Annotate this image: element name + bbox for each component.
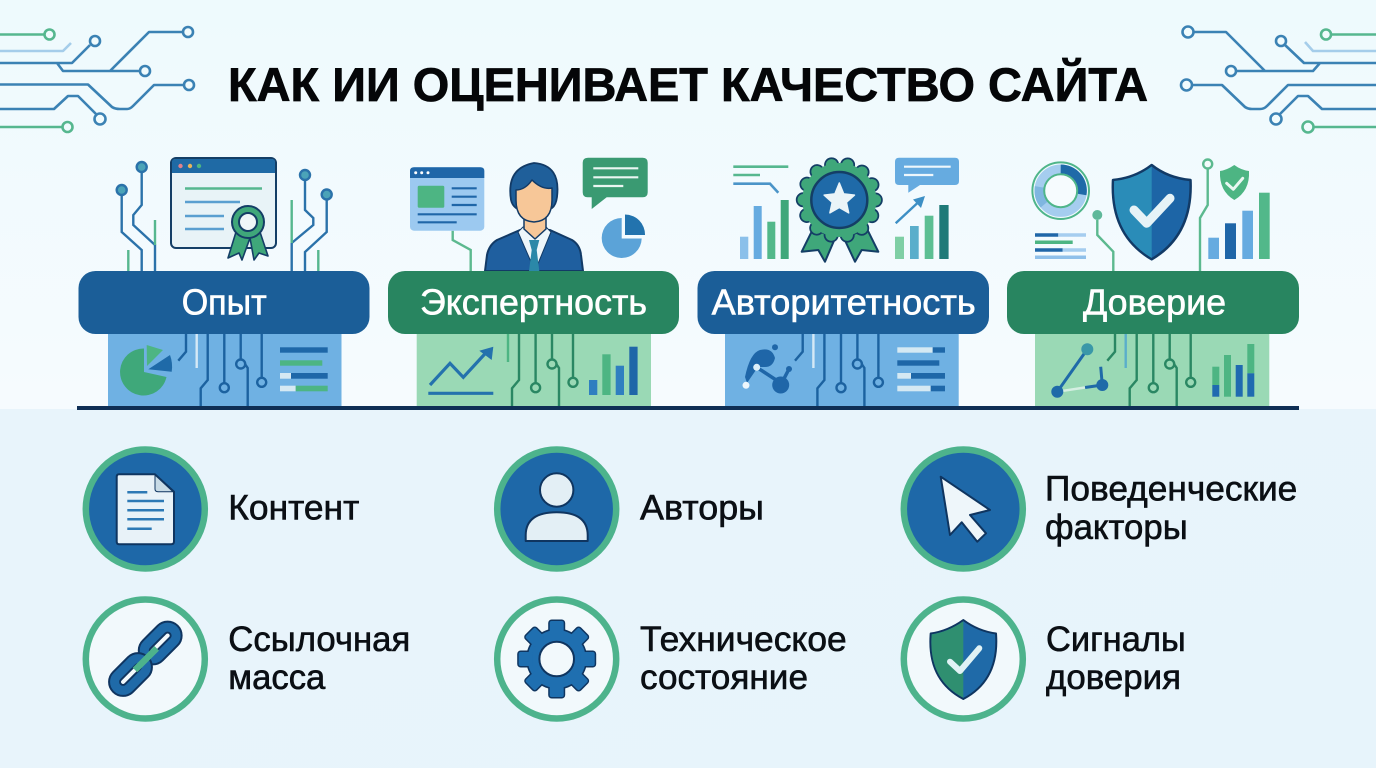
panel: Экспертность	[388, 158, 679, 406]
icon: browser window with certificate	[171, 158, 276, 260]
chart: bars	[589, 347, 638, 395]
icon: browser card	[410, 167, 484, 231]
chart: right bars	[895, 205, 949, 259]
label: Поведенческие	[1045, 470, 1297, 509]
item: Ссылочная масса	[86, 600, 410, 718]
pill: Опыт: Опыт	[182, 282, 267, 322]
base line	[77, 406, 1299, 410]
label	[640, 620, 847, 697]
pill: Авторитетность	[698, 271, 989, 334]
connector	[453, 231, 471, 271]
label: Контент	[228, 488, 359, 527]
lower block: Экспертность	[417, 334, 651, 406]
arrow: growth	[896, 196, 925, 223]
item: Контент	[86, 450, 359, 568]
icon: chain link	[86, 600, 205, 718]
text lines icon	[733, 167, 788, 193]
item: Поведенческие факторы	[904, 450, 1297, 568]
label	[1045, 470, 1297, 547]
icon: network graph	[1051, 343, 1108, 398]
icon: speech bubble	[895, 158, 959, 193]
icon: gear	[497, 600, 616, 718]
panel: Авторитетность	[698, 158, 989, 406]
pill: Опыт	[78, 271, 370, 334]
pill: Авторитетность: Авторитетность	[712, 282, 976, 322]
lower block: Авторитетность	[725, 334, 959, 406]
text lines icon	[1035, 235, 1086, 257]
pill: Экспертность: Экспертность	[420, 282, 647, 322]
circuit lines below pill	[1107, 334, 1195, 406]
icon: large shield	[1113, 165, 1191, 259]
icon: molecule	[742, 344, 792, 394]
label: масса	[228, 658, 326, 697]
chart: donut	[1032, 162, 1089, 219]
circuit lines below pill	[795, 334, 883, 406]
chart: left bars	[740, 200, 789, 259]
title: КАК ИИ ОЦЕНИВАЕТ КАЧЕСТВО САЙТА	[228, 58, 1148, 111]
connector right	[1200, 160, 1212, 271]
label: Авторы	[640, 488, 764, 527]
circuit lines below pill	[178, 334, 266, 406]
item: Техническое состояние	[497, 600, 847, 718]
label: Сигналы	[1046, 620, 1186, 659]
icon: document	[86, 450, 205, 568]
icon: small shield	[1220, 165, 1249, 200]
chart: bars	[1208, 193, 1270, 259]
pill: Доверие: Доверие	[1083, 282, 1226, 322]
label	[228, 620, 410, 697]
item: Авторы	[497, 450, 764, 568]
lower block: Доверие	[1035, 334, 1269, 406]
circuit lines above pill	[117, 162, 332, 271]
chart: stacked bars	[1212, 344, 1254, 397]
decoration: right circuit	[1181, 26, 1376, 132]
label: факторы	[1045, 508, 1188, 547]
circuit lines below pill	[508, 334, 578, 406]
label: состояние	[640, 658, 808, 697]
pill: Экспертность	[388, 271, 679, 334]
decoration: left circuit	[0, 27, 194, 132]
lower block: Опыт	[108, 334, 342, 406]
icon: user	[497, 450, 616, 568]
panel: Доверие	[1007, 160, 1299, 406]
pill: Доверие	[1007, 271, 1299, 334]
icon: expert person	[485, 163, 583, 271]
panel: Опыт	[78, 158, 370, 406]
icon: shield with check	[904, 600, 1023, 718]
icon: pie chart	[602, 214, 645, 258]
label	[1046, 620, 1186, 697]
chart: pie	[120, 345, 172, 395]
label: доверия	[1046, 658, 1181, 697]
icon: cursor	[904, 450, 1023, 568]
connector left	[1092, 210, 1113, 271]
bars	[897, 347, 945, 391]
chart: rising arrow	[428, 347, 493, 393]
icon: speech bubble	[583, 158, 648, 209]
item: Сигналы доверия	[904, 600, 1186, 718]
label: Техническое	[640, 620, 847, 659]
label: Ссылочная	[228, 620, 410, 659]
icon: award badge	[802, 164, 878, 262]
bars	[280, 347, 328, 391]
